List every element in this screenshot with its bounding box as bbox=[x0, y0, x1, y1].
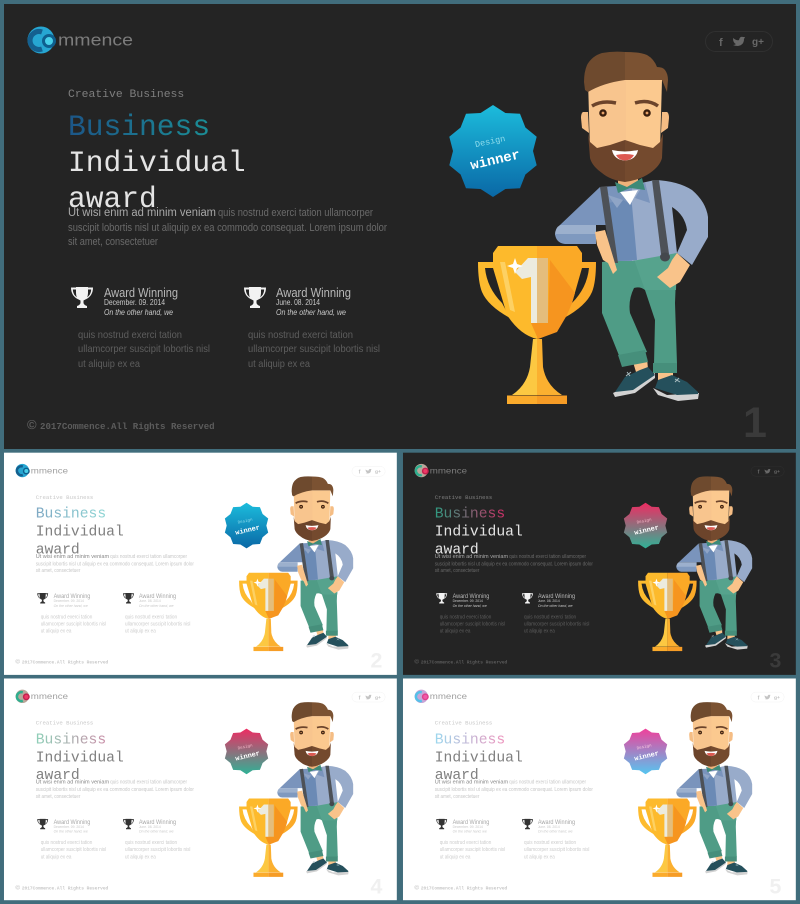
subtitle: Creative Business bbox=[36, 494, 93, 501]
intro paragraph bbox=[435, 554, 593, 574]
award block 1: December. 09. 2014 bbox=[54, 598, 85, 603]
award block 2: June. 08. 2014 bbox=[276, 298, 320, 307]
heading: Individual award: Individual bbox=[36, 525, 124, 541]
heading: Individual award: Individual bbox=[36, 750, 124, 766]
badge: Design bbox=[636, 517, 653, 526]
slide 5: light bbox=[403, 678, 796, 900]
social icons: f bbox=[359, 470, 361, 476]
intro paragraph bbox=[435, 780, 593, 800]
intro paragraph bbox=[36, 554, 194, 574]
illustration: bearded man and trophy bbox=[239, 476, 353, 651]
intro paragraph: Ut wisi enim ad minim veniam bbox=[68, 207, 216, 219]
intro paragraph: quis nostrud exerci tation ullamcorper bbox=[509, 780, 586, 786]
copyright: © bbox=[27, 417, 37, 432]
award block 2: ullamcorper suscipit lobortis nisl bbox=[125, 847, 190, 853]
award block 1: ut aliquip ex ea bbox=[440, 629, 471, 635]
award block 2 bbox=[522, 819, 589, 861]
intro paragraph bbox=[68, 207, 387, 248]
award block 1: On the other hand, we bbox=[104, 308, 173, 317]
badge bbox=[624, 503, 667, 548]
subtitle: Creative Business bbox=[68, 89, 184, 101]
copyright: 2017Commence.All Rights Reserved bbox=[421, 885, 508, 891]
heading: Individual award: award bbox=[68, 182, 157, 216]
illustration: bearded man and trophy bbox=[638, 702, 752, 877]
award block 2: Award Winning bbox=[276, 286, 351, 300]
award block 1: quis nostrud exerci tation bbox=[78, 329, 182, 341]
award block 1: ullamcorper suscipit lobortis nisl bbox=[41, 847, 106, 853]
logo bbox=[415, 690, 467, 703]
logo bbox=[28, 26, 133, 54]
subtitle: Creative Business bbox=[36, 720, 93, 727]
heading: Business: Business bbox=[435, 732, 505, 748]
heading: Individual award: award bbox=[435, 542, 479, 558]
intro paragraph: sit amet, consectetuer bbox=[435, 794, 480, 800]
social icons: g+ bbox=[774, 696, 780, 701]
award block 1: ut aliquip ex ea bbox=[41, 855, 72, 861]
badge bbox=[449, 105, 537, 197]
intro paragraph: quis nostrud exerci tation ullamcorper bbox=[110, 780, 187, 786]
intro paragraph bbox=[36, 780, 194, 800]
award block 1: Award Winning bbox=[453, 593, 490, 600]
badge bbox=[225, 729, 268, 774]
subtitle: Creative Business bbox=[435, 720, 492, 727]
illustration: bearded man and trophy bbox=[478, 52, 708, 404]
intro paragraph: Ut wisi enim ad minim veniam bbox=[36, 780, 109, 786]
award block 1: ut aliquip ex ea bbox=[440, 855, 471, 861]
badge: winner bbox=[235, 524, 261, 538]
award block 1: Award Winning bbox=[453, 819, 490, 826]
award block 1: ullamcorper suscipit lobortis nisl bbox=[78, 343, 210, 355]
heading: Individual award: Individual bbox=[435, 525, 523, 541]
award block 2: On the other hand, we bbox=[139, 603, 174, 608]
social icons: f bbox=[719, 37, 723, 49]
award block 2: ut aliquip ex ea bbox=[524, 629, 555, 635]
badge: Design bbox=[237, 517, 254, 526]
award block 2: Award Winning bbox=[139, 593, 177, 600]
award block 2: June. 08. 2014 bbox=[139, 824, 161, 829]
heading: Business: Business bbox=[36, 507, 106, 523]
logo: mmence bbox=[31, 691, 68, 701]
award block 1 bbox=[71, 286, 210, 370]
heading: Individual award: award bbox=[36, 542, 80, 558]
intro paragraph: Ut wisi enim ad minim veniam bbox=[36, 554, 109, 560]
award block 2: On the other hand, we bbox=[538, 603, 573, 608]
badge bbox=[624, 729, 667, 774]
award block 2: ullamcorper suscipit lobortis nisl bbox=[524, 847, 589, 853]
award block 2: ut aliquip ex ea bbox=[248, 358, 310, 370]
award block 2: On the other hand, we bbox=[538, 829, 573, 834]
copyright: © bbox=[414, 657, 419, 665]
award block 1 bbox=[37, 819, 106, 861]
award block 1: ullamcorper suscipit lobortis nisl bbox=[440, 847, 505, 853]
award block 1: December. 09. 2014 bbox=[453, 598, 484, 603]
social icons: g+ bbox=[375, 696, 381, 701]
logo: mmence bbox=[31, 465, 68, 475]
award block 1: Award Winning bbox=[54, 819, 91, 826]
award block 1: ullamcorper suscipit lobortis nisl bbox=[41, 621, 106, 627]
illustration: bearded man and trophy bbox=[239, 702, 353, 877]
award block 2: On the other hand, we bbox=[276, 308, 346, 317]
heading: Individual award bbox=[36, 750, 124, 784]
award block 2: ullamcorper suscipit lobortis nisl bbox=[248, 343, 380, 355]
intro paragraph: suscipit lobortis nisl ut aliquip ex ea commodo consequat. Lorem ipsum dolor bbox=[36, 787, 194, 793]
award block 1 bbox=[436, 819, 505, 861]
social icons bbox=[706, 32, 772, 52]
award block 1: quis nostrud exerci tation bbox=[440, 614, 491, 620]
award block 2: June. 08. 2014 bbox=[139, 598, 161, 603]
copyright: 2017Commence.All Rights Reserved bbox=[421, 659, 508, 665]
award block 1 bbox=[37, 593, 106, 635]
logo bbox=[16, 690, 68, 703]
award block 1: Award Winning bbox=[104, 286, 178, 300]
logo: mmence bbox=[430, 691, 467, 701]
badge: Design bbox=[474, 134, 506, 150]
award block 2 bbox=[123, 593, 190, 635]
social icons bbox=[352, 466, 385, 476]
social icons: f bbox=[359, 695, 361, 701]
intro paragraph: sit amet, consectetuer bbox=[68, 236, 158, 248]
award block 2 bbox=[123, 819, 190, 861]
intro paragraph: suscipit lobortis nisl ut aliquip ex ea commodo consequat. Lorem ipsum dolor bbox=[36, 561, 194, 567]
award block 1: On the other hand, we bbox=[54, 829, 89, 834]
intro paragraph: suscipit lobortis nisl ut aliquip ex ea commodo consequat. Lorem ipsum dolor bbox=[435, 787, 593, 793]
award block 1 bbox=[436, 593, 505, 635]
award block 2: ut aliquip ex ea bbox=[125, 855, 156, 861]
award block 2: ut aliquip ex ea bbox=[125, 629, 156, 635]
intro paragraph: suscipit lobortis nisl ut aliquip ex ea commodo consequat. Lorem ipsum dolor bbox=[435, 561, 593, 567]
award block 2: June. 08. 2014 bbox=[538, 598, 560, 603]
intro paragraph: Ut wisi enim ad minim veniam bbox=[435, 780, 508, 786]
copyright: 2017Commence.All Rights Reserved bbox=[22, 885, 109, 891]
logo bbox=[16, 464, 68, 477]
badge bbox=[225, 503, 268, 548]
badge: winner bbox=[469, 147, 522, 174]
award block 1: December. 09. 2014 bbox=[54, 824, 85, 829]
copyright: 2017Commence.All Rights Reserved bbox=[40, 421, 215, 432]
badge: Design bbox=[237, 743, 254, 751]
copyright: 2017Commence.All Rights Reserved bbox=[22, 659, 109, 665]
intro paragraph: quis nostrud exerci tation ullamcorper bbox=[218, 207, 373, 219]
award block 1: ut aliquip ex ea bbox=[41, 629, 72, 635]
intro paragraph: sit amet, consectetuer bbox=[435, 568, 480, 574]
award block 2: On the other hand, we bbox=[139, 829, 174, 834]
intro paragraph: Ut wisi enim ad minim veniam bbox=[435, 554, 508, 560]
slide 3: dark bbox=[403, 453, 796, 675]
copyright: © bbox=[414, 883, 419, 891]
award block 2 bbox=[522, 593, 589, 635]
illustration: bearded man and trophy bbox=[638, 476, 752, 651]
page number: 5 bbox=[770, 874, 782, 898]
award block 1: quis nostrud exerci tation bbox=[41, 840, 92, 846]
award block 1: ullamcorper suscipit lobortis nisl bbox=[440, 621, 505, 627]
heading: Individual award bbox=[435, 525, 523, 558]
social icons bbox=[751, 692, 784, 702]
award block 2: Award Winning bbox=[538, 819, 576, 826]
social icons bbox=[751, 466, 784, 476]
heading: Individual award bbox=[36, 525, 124, 558]
intro paragraph: quis nostrud exerci tation ullamcorper bbox=[509, 554, 586, 560]
subtitle: Creative Business bbox=[435, 494, 492, 501]
social icons: f bbox=[758, 695, 760, 701]
award block 1: December. 09. 2014 bbox=[453, 824, 484, 829]
page number: 4 bbox=[371, 874, 383, 898]
intro paragraph: sit amet, consectetuer bbox=[36, 568, 81, 574]
award block 2: quis nostrud exerci tation bbox=[524, 614, 576, 620]
social icons: g+ bbox=[375, 470, 381, 475]
intro paragraph: quis nostrud exerci tation ullamcorper bbox=[110, 554, 187, 560]
social icons: f bbox=[758, 470, 760, 476]
slide 1: dark main bbox=[4, 4, 796, 449]
intro paragraph: suscipit lobortis nisl ut aliquip ex ea commodo consequat. Lorem ipsum dolor bbox=[68, 222, 387, 234]
award block 2: ullamcorper suscipit lobortis nisl bbox=[524, 621, 589, 627]
award block 1: December. 09. 2014 bbox=[104, 298, 165, 307]
award block 2: quis nostrud exerci tation bbox=[125, 840, 177, 846]
slide 4: light bbox=[4, 678, 397, 900]
heading: Business: Business bbox=[36, 732, 106, 748]
award block 2: June. 08. 2014 bbox=[538, 824, 560, 829]
award block 1: On the other hand, we bbox=[54, 603, 89, 608]
award block 1: On the other hand, we bbox=[453, 829, 488, 834]
award block 1: ut aliquip ex ea bbox=[78, 358, 140, 370]
badge: winner bbox=[634, 524, 660, 538]
heading: Individual award: Individual bbox=[435, 750, 523, 766]
badge: Design bbox=[636, 743, 653, 751]
award block 2: quis nostrud exerci tation bbox=[524, 840, 576, 846]
heading: Individual award: Individual bbox=[68, 146, 246, 180]
award block 2: quis nostrud exerci tation bbox=[125, 614, 177, 620]
heading: Individual award bbox=[68, 146, 246, 216]
award block 2: Award Winning bbox=[139, 819, 177, 826]
heading: Individual award bbox=[435, 750, 523, 784]
logo bbox=[415, 464, 467, 477]
heading: Individual award: award bbox=[435, 768, 479, 784]
award block 1: quis nostrud exerci tation bbox=[440, 840, 491, 846]
award block 1: quis nostrud exerci tation bbox=[41, 614, 92, 620]
page number: 1 bbox=[743, 399, 767, 447]
intro paragraph: sit amet, consectetuer bbox=[36, 794, 81, 800]
page number: 2 bbox=[371, 648, 382, 672]
logo: mmence bbox=[430, 465, 467, 475]
award block 2: quis nostrud exerci tation bbox=[248, 329, 353, 341]
social icons: g+ bbox=[774, 470, 780, 475]
copyright: © bbox=[15, 657, 20, 665]
social icons bbox=[352, 692, 385, 702]
page number: 3 bbox=[770, 648, 782, 672]
logo: mmence bbox=[58, 30, 133, 50]
badge: winner bbox=[634, 750, 660, 764]
award block 1: On the other hand, we bbox=[453, 603, 488, 608]
heading: Business: Business bbox=[68, 110, 210, 144]
heading: Business: Business bbox=[435, 507, 505, 523]
badge: winner bbox=[235, 750, 261, 764]
award block 2: ullamcorper suscipit lobortis nisl bbox=[125, 621, 190, 627]
award block 2 bbox=[244, 286, 380, 370]
award block 2: Award Winning bbox=[538, 593, 576, 600]
heading: Individual award: award bbox=[36, 768, 80, 784]
award block 1: Award Winning bbox=[54, 593, 91, 600]
copyright: © bbox=[15, 883, 20, 891]
social icons: g+ bbox=[752, 37, 764, 48]
slide 2: light bbox=[4, 453, 397, 675]
award block 2: ut aliquip ex ea bbox=[524, 855, 555, 861]
